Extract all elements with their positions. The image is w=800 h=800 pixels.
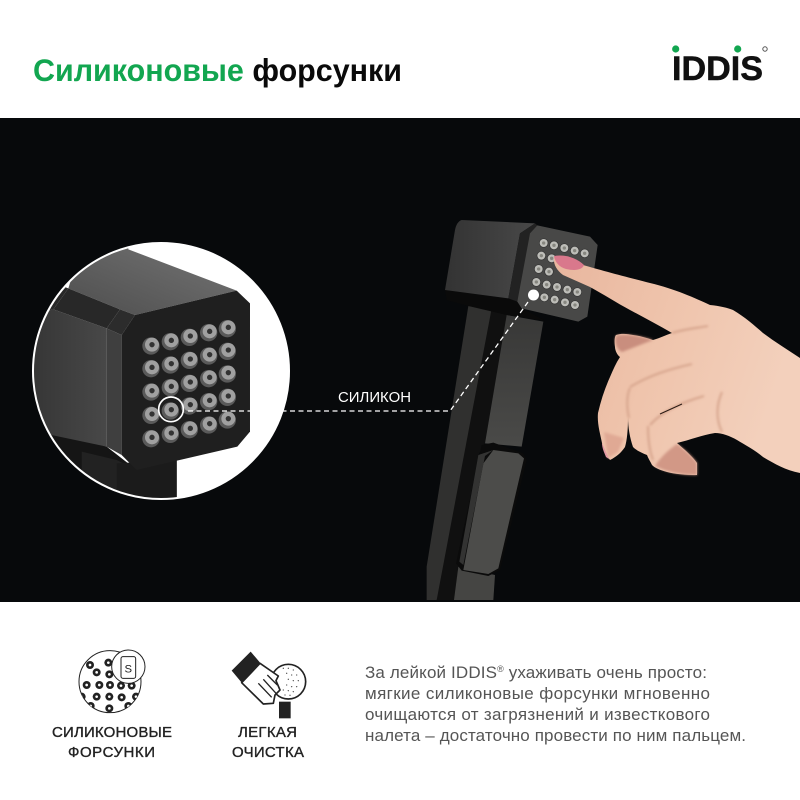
callout label: СИЛИКОН (338, 389, 411, 406)
description text: налета – достаточно провести по ним пальцем. (365, 726, 746, 745)
lens nozzles (142, 320, 236, 447)
lens head top face (68, 243, 237, 315)
fingertip shading (604, 335, 697, 475)
handle front face (485, 315, 543, 447)
photo: shower handle (427, 220, 598, 600)
panel: dark product photo (0, 118, 800, 602)
description text (365, 663, 746, 745)
gaps between fingers (660, 404, 682, 414)
callout: dashed leader line (188, 290, 539, 411)
handle dark channel (437, 308, 507, 600)
description text: За лейкой IDDIS (365, 663, 497, 682)
handle left face (427, 306, 492, 600)
lens head face (122, 291, 250, 470)
icon: silicone nozzles: S (125, 664, 133, 676)
head collar (508, 223, 537, 302)
photo: hand (554, 255, 800, 475)
lens corner band (53, 288, 120, 328)
lens stem area (51, 434, 177, 497)
logo: IDDIS: IDDIS (672, 50, 763, 88)
label: silicone nozzles (52, 724, 172, 761)
slider button (456, 443, 527, 576)
lens chamfer (107, 309, 135, 335)
fingernail (554, 255, 584, 270)
description text: очищаются от загрязнений и известкового (365, 705, 710, 724)
label: silicone nozzles: ФОРСУНКИ (68, 744, 155, 761)
icon: easy cleaning (232, 652, 306, 718)
icon: silicone nozzles (78, 650, 145, 713)
label: easy cleaning (232, 724, 304, 761)
head shadow band (445, 290, 545, 321)
head face (517, 225, 598, 322)
label: easy cleaning: ЛЕГКАЯ (238, 724, 297, 741)
description text: ухаживать очень просто: (504, 663, 707, 682)
handle lower section (454, 567, 495, 600)
label: easy cleaning: ОЧИСТКА (232, 744, 304, 761)
highlight ring (159, 397, 183, 422)
label: silicone nozzles: СИЛИКОНОВЫЕ (52, 724, 172, 741)
lens side strip (107, 328, 122, 455)
lower nail (602, 443, 609, 459)
nozzles (532, 238, 589, 310)
zoom lens: nozzle close-up (20, 243, 289, 510)
description text: мягкие силиконовые форсунки мгновенно (365, 684, 710, 703)
lens head left face (34, 309, 107, 446)
description text: ® (497, 664, 504, 674)
title: Силиконовые форсунки (33, 52, 402, 88)
head side (445, 220, 535, 298)
hand silhouette (554, 257, 800, 475)
finger creases (627, 326, 722, 460)
